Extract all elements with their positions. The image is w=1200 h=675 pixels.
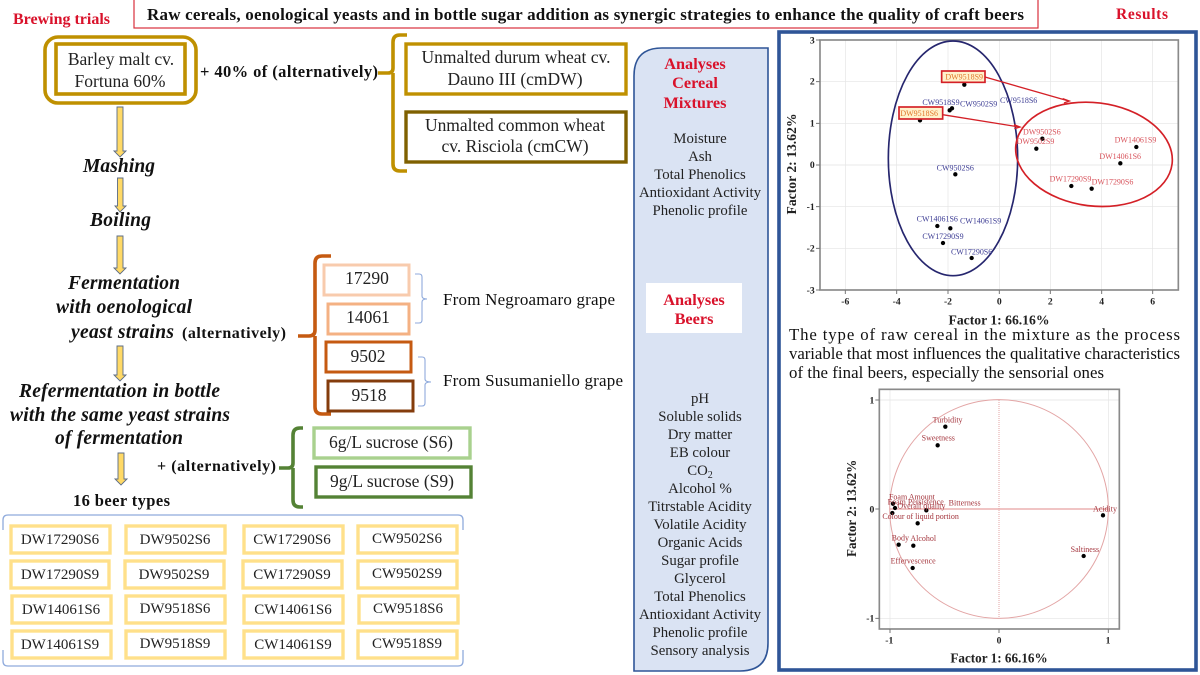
beer type grid: CW9518S9 bbox=[372, 636, 442, 652]
variable labels: Alcohol bbox=[910, 534, 937, 543]
variable labels: Body bbox=[892, 533, 909, 542]
label: plus alternatively (sugar): + (alternatively) bbox=[157, 458, 276, 475]
heading: analyses beers bbox=[646, 283, 742, 333]
chart: loading plot: 1 bbox=[1106, 636, 1111, 647]
box: barley malt bbox=[45, 37, 196, 103]
list: cereal analyses: Total Phenolics bbox=[654, 167, 746, 183]
title bbox=[134, 0, 1038, 28]
list: beer analyses: CO bbox=[687, 463, 708, 479]
title: Raw cereals, oenological yeasts and in bottle sugar addition as synergic strategies to enhance the quality of craft beers bbox=[147, 5, 1024, 24]
bracket: Susumaniello bbox=[418, 357, 431, 406]
box: 9 g/L sucrose bbox=[316, 467, 471, 497]
unit circle bbox=[890, 400, 1108, 618]
box: common wheat bbox=[406, 112, 626, 162]
labels: CW samples: CW9502S6 bbox=[937, 164, 974, 173]
label: plus 40 percent: + 40% of (alternatively) bbox=[200, 62, 378, 81]
beer type grid bbox=[3, 515, 463, 666]
step: mashing: Mashing bbox=[82, 156, 155, 177]
callout: DW9518S9: DW9518S9 bbox=[945, 73, 983, 82]
arrow: to boiling bbox=[115, 178, 126, 212]
chart: loading plot: 0 bbox=[870, 504, 875, 515]
list: beer analyses: Organic Acids bbox=[658, 535, 743, 551]
arrow: to beer types bbox=[115, 453, 127, 485]
chart: score plot: 4 bbox=[1099, 297, 1104, 308]
list: beer analyses: EB colour bbox=[670, 445, 730, 461]
beer type grid: CW9502S9 bbox=[372, 566, 442, 582]
label: Negroamaro: From Negroamaro grape bbox=[443, 290, 615, 309]
box: 6 g/L sucrose: 6g/L sucrose (S6) bbox=[329, 432, 453, 452]
beer type grid: DW9518S9 bbox=[140, 636, 210, 652]
labels: CW samples: CW14061S6 bbox=[917, 214, 958, 223]
labels: DW samples: DW14061S9 bbox=[1115, 136, 1156, 145]
variable points bbox=[890, 424, 1105, 570]
axis title: factor 1: Factor 1: 66.16% bbox=[950, 650, 1048, 665]
panel: analyses bbox=[634, 48, 768, 671]
panel: results frame bbox=[779, 32, 1196, 670]
chart: score plot: 0 bbox=[997, 297, 1002, 308]
heading: analyses cereal mixtures: Analyses bbox=[664, 54, 726, 73]
ellipse: DW group bbox=[1010, 93, 1178, 215]
labels: DW samples: DW17290S6 bbox=[1092, 177, 1133, 186]
text block: key finding: variable that most influences the qualitative characteristics bbox=[789, 344, 1180, 363]
box: strain 14061: 14061 bbox=[346, 307, 390, 327]
chart: score plot: 2 bbox=[810, 77, 815, 88]
chart: loading plot: 1 bbox=[870, 395, 875, 406]
step: refermentation bbox=[10, 381, 230, 449]
heading: analyses cereal mixtures bbox=[663, 54, 727, 112]
heading: analyses beers: Analyses bbox=[663, 290, 725, 309]
text block: key finding: of the final beers, especially the sensorial ones bbox=[789, 363, 1104, 382]
beer type grid: DW9502S9 bbox=[139, 567, 209, 583]
beer type grid: CW17290S6 bbox=[253, 532, 331, 548]
heading: brewing trials: Brewing trials bbox=[13, 11, 110, 28]
callout: DW9518S6: DW9518S6 bbox=[900, 109, 938, 118]
chart: score plot: 0 bbox=[810, 160, 815, 171]
list: beer analyses: Dry matter bbox=[668, 427, 732, 443]
labels: CW samples bbox=[917, 96, 1037, 256]
chart: score plot: 3 bbox=[810, 35, 815, 46]
chart: loading plot bbox=[844, 389, 1119, 665]
labels: CW samples: CW14061S9 bbox=[960, 216, 1001, 225]
list: cereal analyses: Phenolic profile bbox=[653, 203, 748, 219]
list: beer analyses bbox=[639, 391, 762, 659]
arrow: to mashing bbox=[114, 107, 126, 157]
heading: analyses cereal mixtures: Mixtures bbox=[663, 93, 727, 112]
beer type grid: CW14061S6 bbox=[254, 602, 332, 618]
box: 9 g/L sucrose: 9g/L sucrose (S9) bbox=[330, 471, 454, 491]
beer type grid: CW9502S6 bbox=[372, 531, 442, 547]
beer type grid: CW14061S9 bbox=[254, 637, 332, 653]
step: fermentation bbox=[56, 273, 193, 343]
list: cereal analyses: Ash bbox=[688, 149, 713, 165]
beer type grid: DW14061S9 bbox=[21, 637, 99, 653]
list: beer analyses: Alcohol % bbox=[668, 481, 732, 497]
list: cereal analyses: Antioxidant Activity bbox=[639, 185, 762, 201]
axis title: factor 2: Factor 2: 13.62% bbox=[784, 113, 799, 215]
labels: DW samples bbox=[1017, 128, 1156, 186]
chart: loading plot: -1 bbox=[866, 614, 875, 625]
box: strain 14061 bbox=[328, 304, 409, 334]
bracket: sucrose bbox=[279, 428, 303, 507]
list: beer analyses: Sensory analysis bbox=[650, 643, 750, 659]
list: beer analyses: Glycerol bbox=[674, 571, 726, 587]
step: refermentation: with the same yeast strains bbox=[10, 405, 230, 426]
list: beer analyses: 2 bbox=[708, 470, 713, 481]
variable labels: Saltiness bbox=[1071, 545, 1099, 554]
labels: DW samples: DW14061S6 bbox=[1099, 152, 1141, 161]
heading: analyses beers: Beers bbox=[675, 309, 713, 328]
labels: DW samples: DW9502S6 bbox=[1023, 128, 1061, 137]
heading: analyses cereal mixtures: Cereal bbox=[672, 73, 718, 92]
labels: CW samples: CW9502S9 bbox=[960, 99, 997, 108]
arrow: DW9518S6 to DW group bbox=[943, 115, 1020, 129]
box: common wheat: cv. Risciola (cmCW) bbox=[441, 136, 589, 156]
box: barley malt: Barley malt cv. bbox=[68, 49, 174, 69]
ellipse: CW group bbox=[888, 41, 1018, 276]
chart: score plot: 1 bbox=[810, 119, 815, 130]
list: beer analyses: Total Phenolics bbox=[654, 589, 746, 605]
box: strain 9502: 9502 bbox=[350, 346, 386, 366]
box: strain 9502 bbox=[326, 342, 411, 372]
chart: loading plot: -1 bbox=[885, 636, 894, 647]
box: 6 g/L sucrose bbox=[314, 428, 470, 458]
box: common wheat: Unmalted common wheat bbox=[425, 115, 605, 135]
box: strain 9518: 9518 bbox=[352, 385, 387, 405]
data points bbox=[918, 82, 1138, 260]
text block: key finding: The type of raw cereal in the mixture as the process bbox=[789, 325, 1180, 344]
box: durum wheat: Dauno III (cmDW) bbox=[447, 69, 583, 89]
list: beer analyses: Soluble solids bbox=[658, 409, 742, 425]
beer type grid: CW17290S9 bbox=[253, 567, 331, 583]
chart: score plot: -2 bbox=[944, 297, 952, 308]
step: refermentation: of fermentation bbox=[55, 428, 183, 449]
list: beer analyses: pH bbox=[691, 391, 709, 407]
callout: DW9518S9 bbox=[942, 71, 985, 82]
variable labels: Acidity bbox=[1093, 504, 1117, 513]
box: durum wheat: Unmalted durum wheat cv. bbox=[422, 47, 610, 67]
list: beer analyses: Antioxidant Activity bbox=[639, 607, 762, 623]
labels: CW samples: CW9518S6 bbox=[1000, 96, 1037, 105]
step: fermentation: with oenological bbox=[56, 297, 193, 318]
bracket: yeast strains bbox=[298, 256, 331, 414]
list: beer analyses: Titrstable Acidity bbox=[648, 499, 752, 515]
variable labels bbox=[882, 415, 1117, 566]
callout: DW9518S6 bbox=[899, 107, 943, 119]
box: durum wheat bbox=[406, 44, 626, 94]
variable labels: Effervescence bbox=[891, 557, 936, 566]
label: alternatively (yeast): (alternatively) bbox=[182, 325, 286, 342]
bracket: cereals bbox=[378, 35, 407, 171]
beer type grid: DW17290S9 bbox=[21, 567, 99, 583]
step: boiling: Boiling bbox=[89, 210, 151, 231]
labels: DW samples: DW17290S9 bbox=[1050, 175, 1091, 184]
axis title: factor 1: Factor 1: 66.16% bbox=[948, 313, 1050, 328]
box: strain 17290: 17290 bbox=[345, 268, 389, 288]
label: Susumaniello: From Susumaniello grape bbox=[443, 371, 623, 390]
chart: score plot: -6 bbox=[841, 297, 850, 308]
list: beer analyses: Volatile Acidity bbox=[653, 517, 747, 533]
chart: score plot: 2 bbox=[1048, 297, 1053, 308]
step: fermentation: yeast strains bbox=[69, 322, 174, 343]
variable labels: Foam Amount bbox=[889, 492, 936, 501]
labels: CW samples: CW17290S9 bbox=[922, 232, 964, 241]
list: cereal analyses bbox=[639, 131, 762, 219]
beer type grid: DW14061S6 bbox=[22, 602, 101, 618]
list: beer analyses: Phenolic profile bbox=[653, 625, 748, 641]
text block: key finding bbox=[789, 325, 1180, 382]
box: strain 17290 bbox=[324, 265, 409, 295]
beer type grid: CW9518S6 bbox=[373, 601, 443, 617]
chart: score plot bbox=[784, 35, 1178, 328]
variable labels: Colour of liquid portion bbox=[882, 512, 959, 521]
chart: score plot: -2 bbox=[807, 243, 815, 254]
bracket: Negroamaro bbox=[415, 274, 427, 323]
labels: CW samples: CW9518S9 bbox=[922, 98, 960, 107]
variable labels: Foam Persistence bbox=[888, 497, 944, 506]
variable labels: Overall quality bbox=[897, 502, 945, 511]
step: fermentation: Fermentation bbox=[67, 273, 180, 294]
variable labels: Bitterness bbox=[949, 499, 981, 508]
box: strain 9518 bbox=[328, 381, 413, 411]
chart: score plot: -1 bbox=[807, 202, 815, 213]
beer type grid: DW17290S6 bbox=[21, 532, 100, 548]
label: 16 beer types: 16 beer types bbox=[73, 491, 171, 510]
step: refermentation: Refermentation in bottle bbox=[18, 381, 220, 402]
list: beer analyses: Sugar profile bbox=[661, 553, 739, 569]
chart: loading plot: 0 bbox=[997, 636, 1002, 647]
arrow: to fermentation bbox=[114, 236, 126, 274]
chart: score plot: -4 bbox=[893, 297, 901, 308]
variable labels: Turbidity bbox=[933, 415, 963, 424]
arrow: to refermentation bbox=[114, 346, 126, 381]
variable labels: Sweetness bbox=[922, 434, 955, 443]
heading: results: Results bbox=[1116, 6, 1168, 23]
labels: DW samples: DW9502S9 bbox=[1017, 137, 1054, 146]
arrow: DW9518S9 to DW group bbox=[985, 77, 1069, 103]
box: barley malt: Fortuna 60% bbox=[75, 71, 165, 91]
labels: CW samples: CW17290S6 bbox=[951, 247, 992, 256]
beer type grid: DW9502S6 bbox=[140, 532, 211, 548]
chart: score plot: 6 bbox=[1150, 297, 1155, 308]
list: cereal analyses: Moisture bbox=[673, 131, 727, 147]
axis title: factor 2: Factor 2: 13.62% bbox=[844, 460, 859, 557]
chart: score plot: -3 bbox=[807, 285, 815, 296]
beer type grid: DW9518S6 bbox=[140, 601, 211, 617]
